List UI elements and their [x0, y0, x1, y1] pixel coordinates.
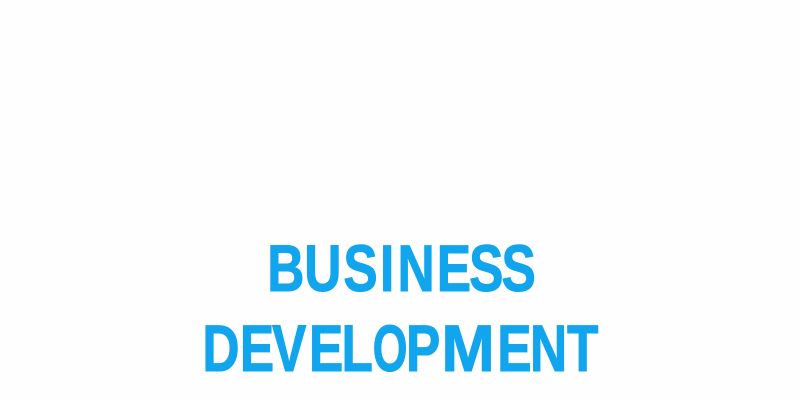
- heading line: development: O: [373, 311, 408, 385]
- heading line: business: BUSINESS: [267, 231, 536, 306]
- heading line: development: DEVEL: [202, 311, 373, 385]
- heading line: development: P: [406, 311, 440, 385]
- heading line: development: M: [441, 311, 495, 385]
- heading line: development: [202, 311, 598, 385]
- heading line: development: ENT: [497, 311, 598, 385]
